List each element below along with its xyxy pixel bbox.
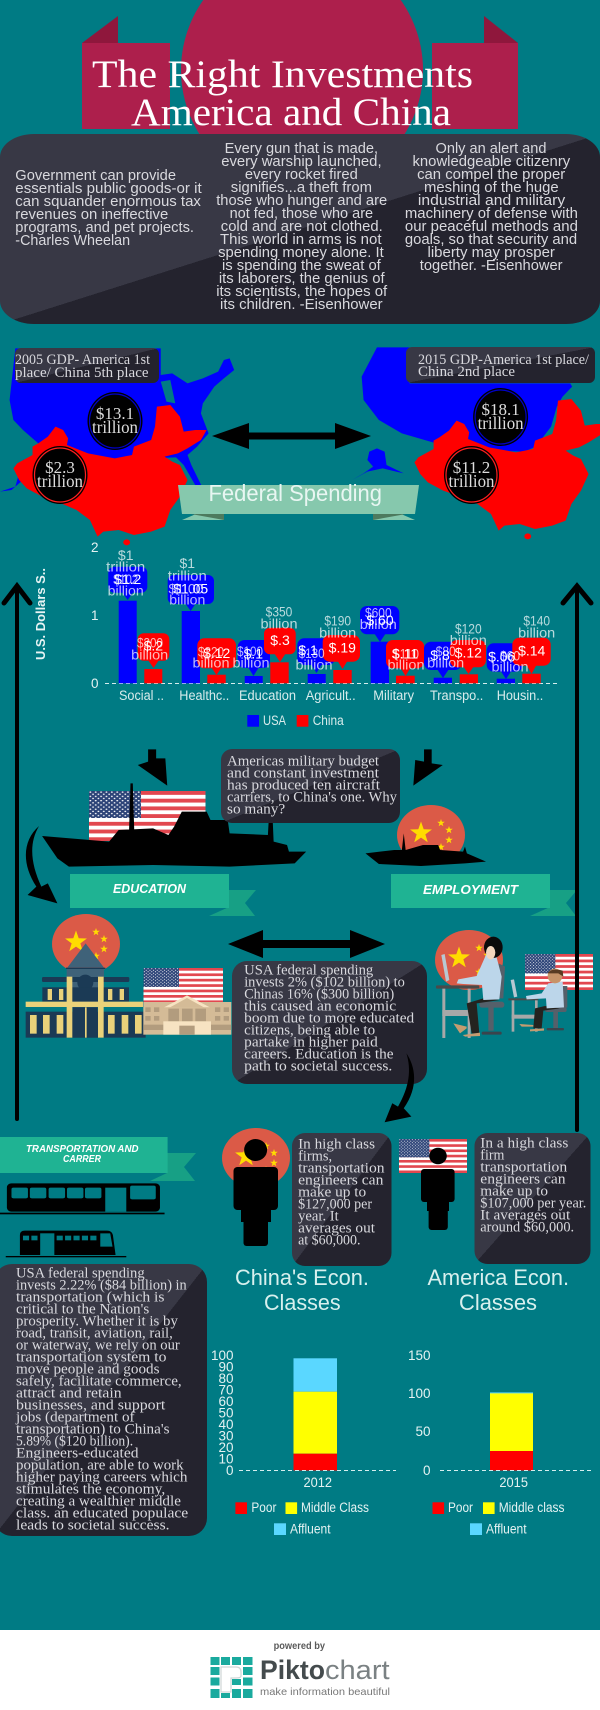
y axis numbers: 80 bbox=[218, 1371, 234, 1386]
panel: transportation spending bbox=[0, 1264, 207, 1536]
callout: military budget bbox=[221, 749, 400, 823]
icon: small train bbox=[6, 1231, 126, 1257]
callout: education spending: USA federal spending bbox=[244, 962, 373, 978]
quote: Eisenhower, every gun: Every gun that is made, bbox=[225, 140, 378, 157]
flag: USA behind school bbox=[144, 968, 223, 1003]
heading: America Econ. Classes bbox=[428, 1265, 569, 1315]
quote: Eisenhower, every gun bbox=[216, 140, 388, 313]
callout: USA engineers pay: $107,000 per year. bbox=[480, 1195, 586, 1211]
callout: 2005 GDP: 2005 GDP- America 1st bbox=[15, 352, 150, 368]
group: Agriculture: billion bbox=[296, 656, 332, 672]
group: Healthcare: $1 bbox=[180, 555, 195, 571]
quote: Charles Wheelan: Government can provide bbox=[15, 167, 176, 184]
x axis labels: Agricult.. bbox=[306, 688, 356, 703]
badge: China 2005 $2.3 trillion: trillion bbox=[37, 471, 83, 491]
group: Healthcare: $1.05 bbox=[173, 580, 208, 596]
badge: USA 2015 $18.1 trillion: $18.1 bbox=[481, 400, 520, 419]
quote: Eisenhower, alert citizenry: meshing of the huge bbox=[424, 179, 559, 196]
group: Agriculture bbox=[296, 613, 360, 683]
flag: China circle behind engineer bbox=[222, 1128, 290, 1188]
group: Social: billion bbox=[108, 583, 144, 599]
arrow: military to China ship bbox=[413, 749, 443, 786]
callout: USA engineers pay: firm bbox=[480, 1147, 505, 1163]
quote: Eisenhower, every gun: every rocket fired bbox=[245, 166, 358, 183]
powered by: powered by bbox=[274, 1640, 325, 1652]
quote: Eisenhower, every gun: spending money alone. It bbox=[218, 244, 385, 261]
callout: China engineers pay: at $60,000. bbox=[298, 1232, 360, 1248]
x axis labels: Military bbox=[373, 688, 414, 703]
badge: China 2015 $11.2 trillion bbox=[444, 446, 499, 504]
quote: Eisenhower, every gun: cold and are not clothed. bbox=[221, 218, 383, 235]
badge: China 2005 $2.3 trillion bbox=[32, 446, 88, 504]
group: Housing: $60 bbox=[500, 648, 520, 664]
group: Military: $.60 bbox=[366, 612, 394, 628]
quote: Eisenhower, every gun: signifies...a theft from bbox=[231, 179, 372, 196]
group: Military: $110 bbox=[393, 645, 419, 661]
panel: transportation spending: 5.89% ($120 billion). bbox=[16, 1433, 133, 1449]
quote: Eisenhower, alert citizenry: together. -Eisenhower bbox=[420, 257, 563, 274]
callout: USA engineers pay: In a high class bbox=[480, 1135, 569, 1151]
quote: Eisenhower, alert citizenry: can compel the proper bbox=[417, 166, 565, 183]
quote: Eisenhower, every gun: is spending the sweat of bbox=[222, 257, 382, 274]
panel: transportation spending: population, are able to work bbox=[16, 1457, 184, 1473]
badge: USA 2015 $18.1 trillion: trillion bbox=[478, 413, 524, 433]
legend: USA bbox=[263, 713, 286, 728]
quote: Charles Wheelan bbox=[15, 167, 203, 249]
chart: America economic classes bbox=[408, 1348, 591, 1536]
heading: China's Econ. Classes bbox=[235, 1265, 369, 1315]
group: Housing: $.06 bbox=[488, 649, 516, 665]
panel: transportation spending: stimulates the economy, bbox=[16, 1481, 165, 1497]
group: Education: $100 bbox=[237, 643, 263, 659]
legend bbox=[247, 713, 344, 728]
group: Social: billion bbox=[131, 646, 168, 662]
y axis numbers: 30 bbox=[218, 1428, 234, 1444]
map: 2005 USA and China bbox=[0, 348, 234, 545]
group: Transportation: $120 bbox=[455, 620, 482, 636]
callout: China engineers pay: In high class bbox=[298, 1136, 375, 1152]
panel: transportation spending: transportation (which is bbox=[16, 1289, 165, 1305]
panel: transportation spending: transportation system to bbox=[16, 1349, 166, 1365]
badge: China 2015 $11.2 trillion: trillion bbox=[448, 471, 494, 491]
panel: transportation spending: road, transit, aviation, rail, bbox=[16, 1325, 173, 1341]
chart: America economic classes: 2015 bbox=[499, 1475, 528, 1490]
panel: transportation spending: invests 2.22% ($84 billion) in bbox=[16, 1277, 187, 1293]
callout: education spending: Chinas 16% ($300 billion) bbox=[244, 986, 394, 1002]
group: Military: billion bbox=[388, 656, 424, 672]
badge: China 2005 $2.3 trillion: $2.3 bbox=[45, 458, 75, 477]
y axis numbers: 0 bbox=[423, 1463, 430, 1478]
y axis numbers: 90 bbox=[218, 1360, 234, 1374]
group: Housing: billion bbox=[492, 659, 528, 675]
panel: transportation spending: safely, facilitate commerce, bbox=[16, 1373, 182, 1389]
quote: Eisenhower, every gun: its scientists, the hopes of bbox=[216, 283, 388, 300]
map: 2015 USA and China bbox=[352, 347, 600, 539]
group: Housing: $.14 bbox=[518, 642, 546, 658]
title: The Right Investments bbox=[92, 53, 473, 96]
heading: China's Econ. Classes: China's Econ. bbox=[235, 1265, 369, 1290]
badge: USA 2005 $13.1 trillion: $13.1 bbox=[96, 404, 134, 423]
legend bbox=[432, 1500, 565, 1536]
callout: China engineers pay: averages out bbox=[298, 1220, 375, 1236]
quote: Eisenhower, every gun: those who hunger and are bbox=[216, 192, 387, 209]
panel: transportation spending: prosperity. Whether it is by bbox=[16, 1313, 179, 1329]
callout: China engineers pay bbox=[292, 1133, 392, 1266]
worker 1 desk bbox=[436, 954, 479, 1038]
group: Housing: billion bbox=[518, 624, 555, 640]
flag: USA behind worker bbox=[525, 954, 593, 990]
wordmark bbox=[260, 1655, 390, 1698]
group: Transportation: $80 bbox=[436, 643, 456, 659]
group: Social: $102 bbox=[113, 571, 138, 587]
group: Housing bbox=[487, 613, 555, 683]
panel: transportation spending: higher paying careers which bbox=[16, 1469, 188, 1485]
group: Agriculture: $.1 bbox=[298, 642, 318, 658]
y axis numbers: 0 bbox=[91, 676, 99, 691]
group: Education: $.1 bbox=[244, 645, 263, 661]
legend: China bbox=[313, 713, 344, 728]
quote: Eisenhower, every gun: This world in arms is not bbox=[220, 231, 382, 248]
callout: USA engineers pay: make up to bbox=[480, 1183, 548, 1199]
callout: 2005 GDP bbox=[15, 348, 159, 383]
arrow: double education employment bbox=[228, 930, 385, 958]
group: Social: $1.2 bbox=[114, 571, 142, 587]
group: Transportation: billion bbox=[427, 654, 464, 670]
panel: transportation spending: or waterway, we rely on our bbox=[16, 1337, 180, 1353]
badge: USA 2005 $13.1 trillion: trillion bbox=[92, 417, 138, 437]
y axis numbers: 2 bbox=[91, 540, 99, 555]
group: Transportation: billion bbox=[450, 632, 487, 648]
quote: Eisenhower, alert citizenry: our peaceful methods and bbox=[405, 218, 578, 235]
callout: China engineers pay: make up to bbox=[298, 1184, 366, 1200]
stacked bar 2012 bbox=[294, 1358, 337, 1470]
callout: China engineers pay: $127,000 per bbox=[298, 1196, 372, 1212]
icon: large train bbox=[0, 1183, 165, 1214]
group: Social: trillion bbox=[106, 559, 145, 575]
panel: transportation spending: class. an educated populace bbox=[16, 1505, 188, 1521]
callout: education spending: partake in higher paid bbox=[244, 1034, 379, 1050]
panel: transportation spending: critical to the Nation's bbox=[16, 1301, 150, 1317]
ribbon: transportation bbox=[0, 1137, 196, 1181]
y axis numbers: 60 bbox=[218, 1394, 234, 1409]
panel: transportation spending: Engineers-educated bbox=[16, 1445, 139, 1461]
quote: Eisenhower, every gun: not fed, those who are bbox=[230, 205, 373, 222]
panel: transportation spending: attract and retain bbox=[16, 1385, 122, 1401]
flag: China circle behind small ship bbox=[397, 805, 465, 865]
y axis title: U.S. Dollars S.. bbox=[33, 568, 48, 660]
banner: Federal Spending bbox=[178, 480, 419, 520]
panel: transportation spending: USA federal spending bbox=[16, 1265, 145, 1281]
quote: Eisenhower, alert citizenry: Only an alert and bbox=[436, 140, 546, 157]
quote: Eisenhower, every gun: its children. -Eisenhower bbox=[220, 296, 383, 313]
icon: Piktochart logo bbox=[210, 1657, 252, 1698]
callout: education spending: careers. Education is the bbox=[244, 1046, 394, 1062]
wordmark: Pikto bbox=[260, 1655, 325, 1685]
panel: transportation spending: leads to societal success. bbox=[16, 1517, 170, 1533]
callout: military budget: Americas military budget bbox=[227, 754, 379, 770]
stacked bar 2015 bbox=[490, 1392, 533, 1470]
callout: education spending: this caused an economic bbox=[244, 998, 396, 1014]
x axis labels: Healthc.. bbox=[179, 688, 229, 703]
badge: USA 2005 $13.1 trillion bbox=[88, 392, 142, 450]
group: Housing: $140 bbox=[523, 613, 550, 629]
y axis numbers: 100 bbox=[408, 1386, 430, 1401]
chart: China economic classes bbox=[211, 1348, 396, 1536]
callout: 2015 GDP bbox=[406, 347, 595, 383]
arrow: double between maps bbox=[212, 423, 371, 449]
ribbon: employment: EMPLOYMENT bbox=[423, 882, 519, 897]
y axis numbers: 10 bbox=[218, 1452, 234, 1466]
y axis numbers bbox=[91, 540, 99, 691]
quote: Eisenhower, alert citizenry: machinery of defense with bbox=[405, 205, 578, 222]
quote: Eisenhower, every gun: every warship launched, bbox=[221, 153, 382, 170]
y axis numbers bbox=[211, 1348, 234, 1478]
icon: workers at desks bbox=[436, 937, 567, 1038]
callout: China engineers pay: firms, bbox=[298, 1148, 332, 1164]
quote: Eisenhower, alert citizenry: knowledgeable citizenry bbox=[412, 153, 571, 170]
panel: transportation spending: businesses, and support bbox=[16, 1397, 165, 1413]
group: Healthcare: billion bbox=[192, 654, 230, 670]
ribbon: transportation: CARRER bbox=[63, 1153, 101, 1165]
callout: USA engineers pay: It averages out bbox=[480, 1207, 570, 1223]
callout: education spending: boom due to more educated bbox=[244, 1010, 415, 1026]
callout: 2015 GDP: 2015 GDP-America 1st place/ bbox=[418, 352, 590, 368]
group: Agriculture: $130 bbox=[299, 645, 325, 661]
x axis labels: Housin.. bbox=[497, 688, 543, 703]
legend: Affluent bbox=[486, 1521, 527, 1536]
worker 1 figure bbox=[453, 937, 505, 1037]
legend: Middle Class bbox=[301, 1500, 369, 1515]
y axis numbers: 1 bbox=[91, 608, 99, 623]
callout: 2015 GDP: China 2nd place bbox=[418, 364, 515, 380]
quote: Eisenhower, alert citizenry: liberty may prosper bbox=[428, 244, 555, 261]
y axis numbers: 150 bbox=[408, 1348, 430, 1363]
group: Healthcare: $220 bbox=[198, 644, 224, 660]
callout: 2005 GDP: place/ China 5th place bbox=[15, 365, 148, 381]
chart: China economic classes: 2012 bbox=[304, 1475, 332, 1490]
panel: transportation spending: transportation) to China's bbox=[16, 1421, 170, 1437]
y axis numbers: 50 bbox=[218, 1406, 234, 1420]
callout: education spending: citizens, being able to bbox=[244, 1022, 375, 1038]
legend: Middle class bbox=[499, 1500, 565, 1515]
group: Education bbox=[232, 604, 298, 683]
group: Military: $600 bbox=[365, 604, 392, 620]
y axis numbers: 40 bbox=[218, 1417, 234, 1432]
group: Social: $.2 bbox=[144, 638, 163, 654]
group: Agriculture: billion bbox=[319, 624, 356, 640]
arrow: military to ship bbox=[138, 749, 167, 786]
title banner with red circle bbox=[82, 0, 518, 191]
callout: USA engineers pay: around $60,000. bbox=[480, 1219, 574, 1235]
quote: Eisenhower, alert citizenry: goals, so that security and bbox=[405, 231, 577, 248]
callout: military budget: and constant investment bbox=[227, 766, 379, 782]
quote: Eisenhower, every gun: its laborers, the genius of bbox=[219, 270, 385, 287]
group: Education: $350 bbox=[266, 604, 293, 620]
baseline bbox=[105, 682, 557, 684]
quote: Charles Wheelan: -Charles Wheelan bbox=[15, 232, 130, 249]
y axis numbers: 100 bbox=[211, 1348, 234, 1363]
panel: transportation spending: creating a wealthier middle bbox=[16, 1493, 181, 1509]
x axis labels bbox=[119, 688, 543, 703]
x axis labels: Education bbox=[239, 688, 296, 703]
chart: federal spending bar chart bbox=[33, 540, 557, 728]
title bbox=[92, 53, 473, 134]
icon: USA engineer figure bbox=[421, 1148, 455, 1230]
legend: Poor bbox=[448, 1500, 473, 1515]
x axis labels: Transpo.. bbox=[430, 688, 483, 703]
legend: Affluent bbox=[290, 1521, 331, 1536]
group: Transportation: $.8 bbox=[430, 647, 450, 663]
quote: Eisenhower, alert citizenry: industrial and military bbox=[418, 192, 566, 209]
badge: China 2015 $11.2 trillion: $11.2 bbox=[453, 458, 490, 477]
group: Healthcare: billion bbox=[169, 591, 205, 607]
callout: education spending bbox=[232, 961, 427, 1084]
group: Healthcare bbox=[168, 555, 236, 683]
worker 2 figure bbox=[519, 969, 567, 1031]
arrow: curved to education bbox=[26, 826, 57, 903]
flag: China circle behind school bbox=[52, 914, 120, 974]
callout: USA engineers pay: engineers can bbox=[480, 1171, 566, 1187]
arrow: curved to transport careers bbox=[385, 1053, 414, 1122]
quote: Charles Wheelan: revenues on ineffective bbox=[15, 206, 168, 223]
wordmark: make information beautiful bbox=[260, 1686, 390, 1698]
group: Social: $200 bbox=[137, 635, 163, 651]
panel: transportation spending: move people and goods bbox=[16, 1361, 160, 1377]
arrow: long left up bbox=[4, 586, 30, 1119]
callout: China engineers pay: engineers can bbox=[298, 1172, 384, 1188]
group: Healthcare: $.12 bbox=[203, 645, 231, 661]
callout: military budget: carriers, to China's one. Why bbox=[227, 790, 398, 806]
worker 2 desk bbox=[508, 979, 538, 1032]
group: Military: billion bbox=[360, 616, 397, 632]
group: Education: billion bbox=[232, 654, 270, 670]
group: Education: billion bbox=[260, 615, 298, 631]
x axis labels: Social .. bbox=[119, 688, 164, 703]
title: America and China bbox=[131, 91, 451, 134]
group: Transportation bbox=[424, 620, 487, 683]
arrow: long right up bbox=[563, 586, 591, 1130]
group: Transportation: $.12 bbox=[455, 644, 482, 660]
quote: Eisenhower, alert citizenry bbox=[405, 140, 578, 274]
callout: education spending: path to societal success. bbox=[244, 1058, 392, 1074]
wordmark: chart bbox=[325, 1655, 390, 1685]
banner: Federal Spending: Federal Spending bbox=[208, 480, 382, 506]
group: Agriculture: $190 bbox=[324, 613, 351, 629]
legend: Poor bbox=[251, 1500, 277, 1515]
panel: transportation spending: jobs (department of bbox=[15, 1409, 135, 1425]
y axis numbers bbox=[408, 1348, 430, 1478]
icon: China engineer figure bbox=[234, 1139, 278, 1246]
badge: USA 2015 $18.1 trillion bbox=[473, 388, 528, 446]
flag: China circle behind workers bbox=[435, 930, 503, 990]
callout: military budget: has produced ten aircraft bbox=[227, 778, 380, 794]
icon: China school building bbox=[26, 943, 146, 1038]
group: Healthcare: $1.00 bbox=[168, 580, 204, 596]
group: Military bbox=[360, 604, 424, 683]
y axis numbers: 50 bbox=[415, 1424, 430, 1439]
legend bbox=[235, 1500, 369, 1536]
ribbon: employment bbox=[391, 874, 577, 916]
quote: Charles Wheelan: essentials public goods-or it bbox=[15, 180, 203, 197]
y axis numbers: 20 bbox=[218, 1440, 234, 1455]
group: Healthcare: trillion bbox=[168, 568, 207, 584]
y axis numbers: 0 bbox=[226, 1463, 234, 1478]
group: Education: $.3 bbox=[270, 632, 290, 648]
footer bbox=[0, 1630, 600, 1710]
flag: USA behind engineer bbox=[399, 1139, 467, 1173]
ribbon: transportation: TRANSPORTATION AND bbox=[26, 1143, 139, 1155]
icon: China ship bbox=[365, 833, 486, 866]
quote: Charles Wheelan: can squander enormous tax bbox=[15, 193, 201, 210]
group: Social: $1 bbox=[118, 547, 134, 563]
callout: USA engineers pay bbox=[474, 1133, 590, 1264]
callout: USA engineers pay: transportation bbox=[480, 1159, 568, 1175]
group: Military: $.11 bbox=[392, 645, 418, 661]
heading: China's Econ. Classes: Classes bbox=[264, 1290, 341, 1315]
group: Agriculture: $.19 bbox=[329, 640, 356, 656]
icon: USA warship bbox=[42, 783, 306, 867]
ribbon: education: EDUCATION bbox=[113, 881, 187, 896]
heading: America Econ. Classes: America Econ. bbox=[428, 1265, 569, 1290]
callout: China engineers pay: year. It bbox=[298, 1208, 339, 1224]
icon: USA college building bbox=[143, 995, 231, 1035]
y axis numbers: 70 bbox=[218, 1382, 234, 1398]
callout: military budget: so many? bbox=[227, 802, 285, 818]
callout: education spending: invests 2% ($102 billion) to bbox=[244, 974, 405, 990]
heading: America Econ. Classes: Classes bbox=[459, 1290, 537, 1315]
flag: USA behind ship bbox=[89, 791, 206, 841]
quote: Charles Wheelan: programs, and pet projects. bbox=[15, 219, 194, 236]
panel: quotes bbox=[0, 134, 600, 324]
callout: China engineers pay: transportation bbox=[298, 1160, 385, 1176]
group: Social bbox=[106, 547, 169, 683]
ribbon: education bbox=[70, 874, 256, 916]
